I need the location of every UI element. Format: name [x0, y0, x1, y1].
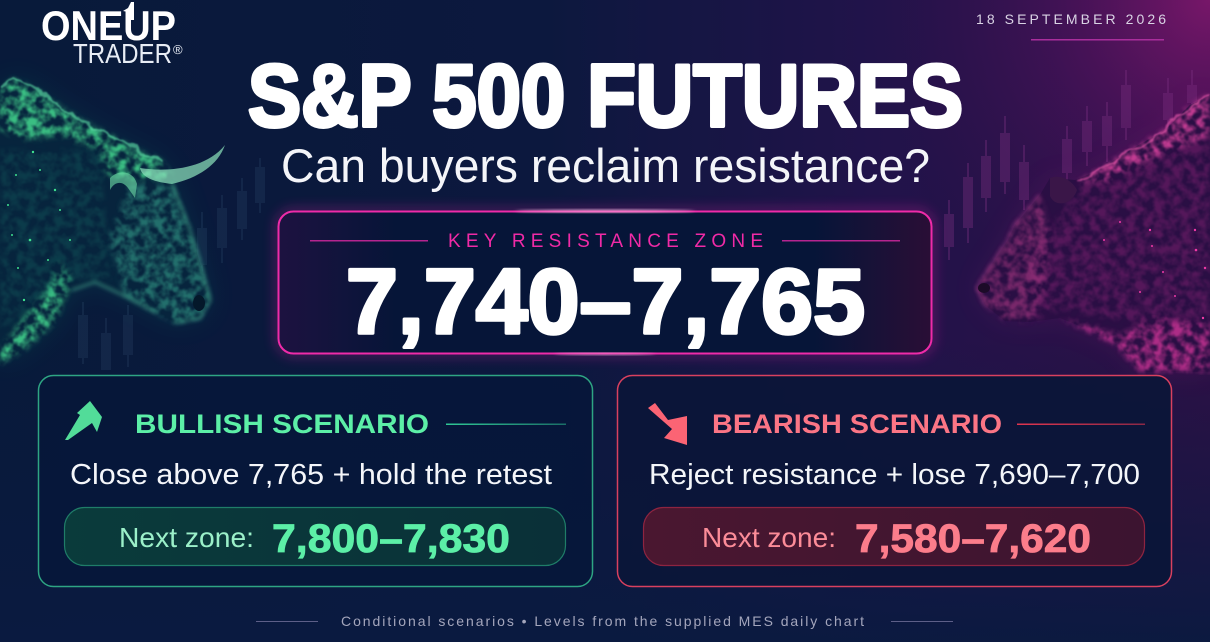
pill: bullish next zone: 7,800–7,830	[272, 517, 510, 561]
bear illustration	[977, 95, 1210, 372]
title: S&P 500 FUTURES	[248, 46, 963, 145]
right ghost candlesticks	[944, 70, 1197, 260]
icon: up arrow	[65, 401, 102, 440]
logo: ONEUP	[41, 2, 176, 49]
pill: bearish next zone: Next zone:	[702, 522, 836, 553]
heading: bearish scenario: BEARISH SCENARIO	[712, 409, 1002, 439]
footer note: Conditional scenarios • Levels from the supplied MES daily chart	[341, 613, 864, 629]
icon: down arrow	[648, 403, 687, 445]
text: bearish condition: Reject resistance + lose 7,690–7,700	[649, 459, 1140, 491]
logo	[41, 2, 183, 69]
pill: bearish next zone: 7,580–7,620	[855, 517, 1091, 561]
panel: bearish scenario	[618, 376, 1172, 586]
pill: bullish next zone: Next zone:	[119, 522, 254, 553]
panel: bullish scenario	[38, 376, 592, 586]
left ghost candlesticks	[78, 158, 265, 370]
text: bullish condition: Close above 7,765 + hold the retest	[70, 459, 552, 491]
date: 18 SEPTEMBER 2026	[976, 11, 1166, 27]
bull illustration	[0, 78, 225, 365]
pill: bearish next zone	[644, 508, 1144, 566]
heading: bullish scenario: BULLISH SCENARIO	[135, 409, 429, 439]
logo: ®	[173, 42, 183, 57]
subtitle: Can buyers reclaim resistance?	[281, 139, 930, 192]
number: key resistance range: 7,740–7,765	[346, 251, 865, 353]
label: key resistance zone: KEY RESISTANCE ZONE	[448, 231, 763, 252]
logo: TRADER	[73, 38, 172, 69]
pill: bullish next zone	[64, 508, 566, 566]
panel: key resistance zone	[278, 210, 932, 355]
